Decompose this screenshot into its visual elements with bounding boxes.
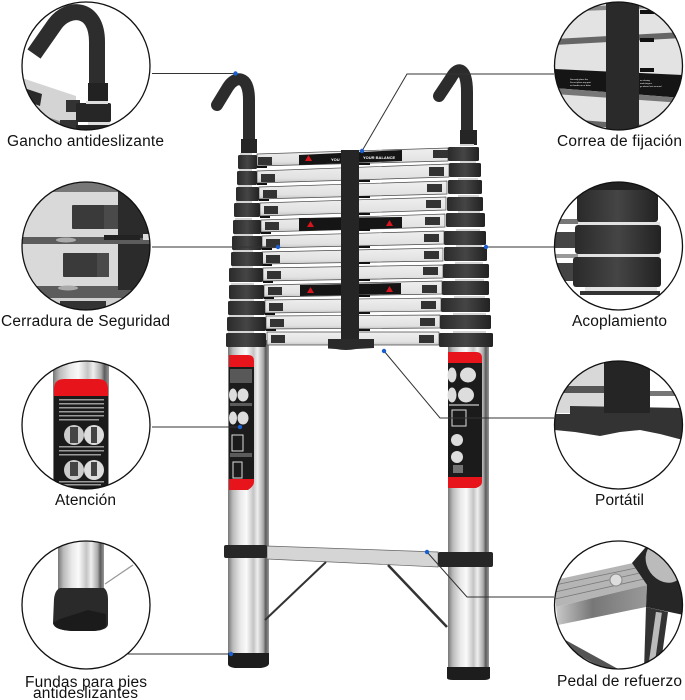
rung latches (258, 150, 448, 343)
panel: fixing strap detail: gs above last secured (640, 85, 662, 88)
right warning sticker (448, 352, 482, 488)
right pedal band (438, 552, 493, 567)
panel: fixing strap detail: or thumbs on or betw (570, 84, 591, 87)
label: Portátil: Portátil (595, 492, 644, 509)
label: Acoplamiento: Acoplamiento (572, 313, 667, 330)
panel: portable handle detail (554, 361, 683, 489)
left hook (217, 79, 249, 140)
warning labels on rungs: YOUR BALANCE (363, 155, 396, 160)
blue dots (229, 71, 488, 656)
label: Correa de fijación: Correa de fijación (557, 133, 682, 150)
panel: fixing strap detail: Do not place any part (570, 81, 591, 84)
right collars (439, 147, 493, 347)
right strut (388, 565, 447, 627)
right hook (439, 70, 467, 132)
left collar rings (228, 153, 254, 333)
label: Atención: Atención (55, 492, 116, 509)
panel: fixing strap detail (554, 0, 683, 132)
reinforcement pedal (267, 546, 438, 567)
label: Gancho antideslizante: Gancho antideslizante (7, 133, 164, 150)
panel: coupling detail (554, 182, 683, 310)
label: Cerradura de Seguridad: Cerradura de Seguridad (1, 313, 170, 330)
panel: hook detail (22, 2, 150, 131)
panel: fixing strap detail: Securely place the (570, 78, 589, 81)
warning labels on rungs: YOU (331, 157, 340, 162)
panel: reinforcement pedal detail (554, 534, 685, 672)
leader line: hook (152, 72, 235, 74)
left strut (265, 562, 326, 620)
leader line: attention (152, 426, 240, 428)
leader line: pedal (427, 552, 554, 597)
label: Pedal de refuerzo: Pedal de refuerzo (557, 673, 682, 690)
leader line: feet (128, 653, 231, 655)
left warning sticker (229, 355, 254, 490)
fixing strap (341, 150, 359, 340)
left collars (226, 155, 266, 347)
rungs (257, 148, 449, 345)
label: Fundas para pies antideslizantes: Fundas para pies (25, 674, 147, 691)
hook collars (241, 130, 477, 153)
leader line: coupling (486, 246, 554, 248)
panel: attention sticker detail (22, 361, 150, 491)
panel: non-slip foot detail (22, 541, 150, 669)
left lower tube (228, 340, 269, 668)
panel: fixing strap detail: en closing (640, 80, 651, 82)
black ledges beneath rungs (257, 163, 370, 331)
right lower tube (447, 340, 490, 680)
right collar rings (453, 144, 486, 333)
label: Fundas para pies antideslizantes (25, 674, 147, 700)
panel: security lock detail (22, 182, 152, 312)
leader line: strap (362, 74, 554, 151)
ladder illustration (217, 70, 493, 680)
carrying handle (328, 339, 374, 350)
leader line: portable (384, 351, 554, 418)
panel: fixing strap detail: ands,fingers (640, 82, 653, 85)
left pedal band (224, 545, 267, 558)
warning labels on rungs (299, 150, 402, 296)
leader line: lock (152, 246, 278, 248)
